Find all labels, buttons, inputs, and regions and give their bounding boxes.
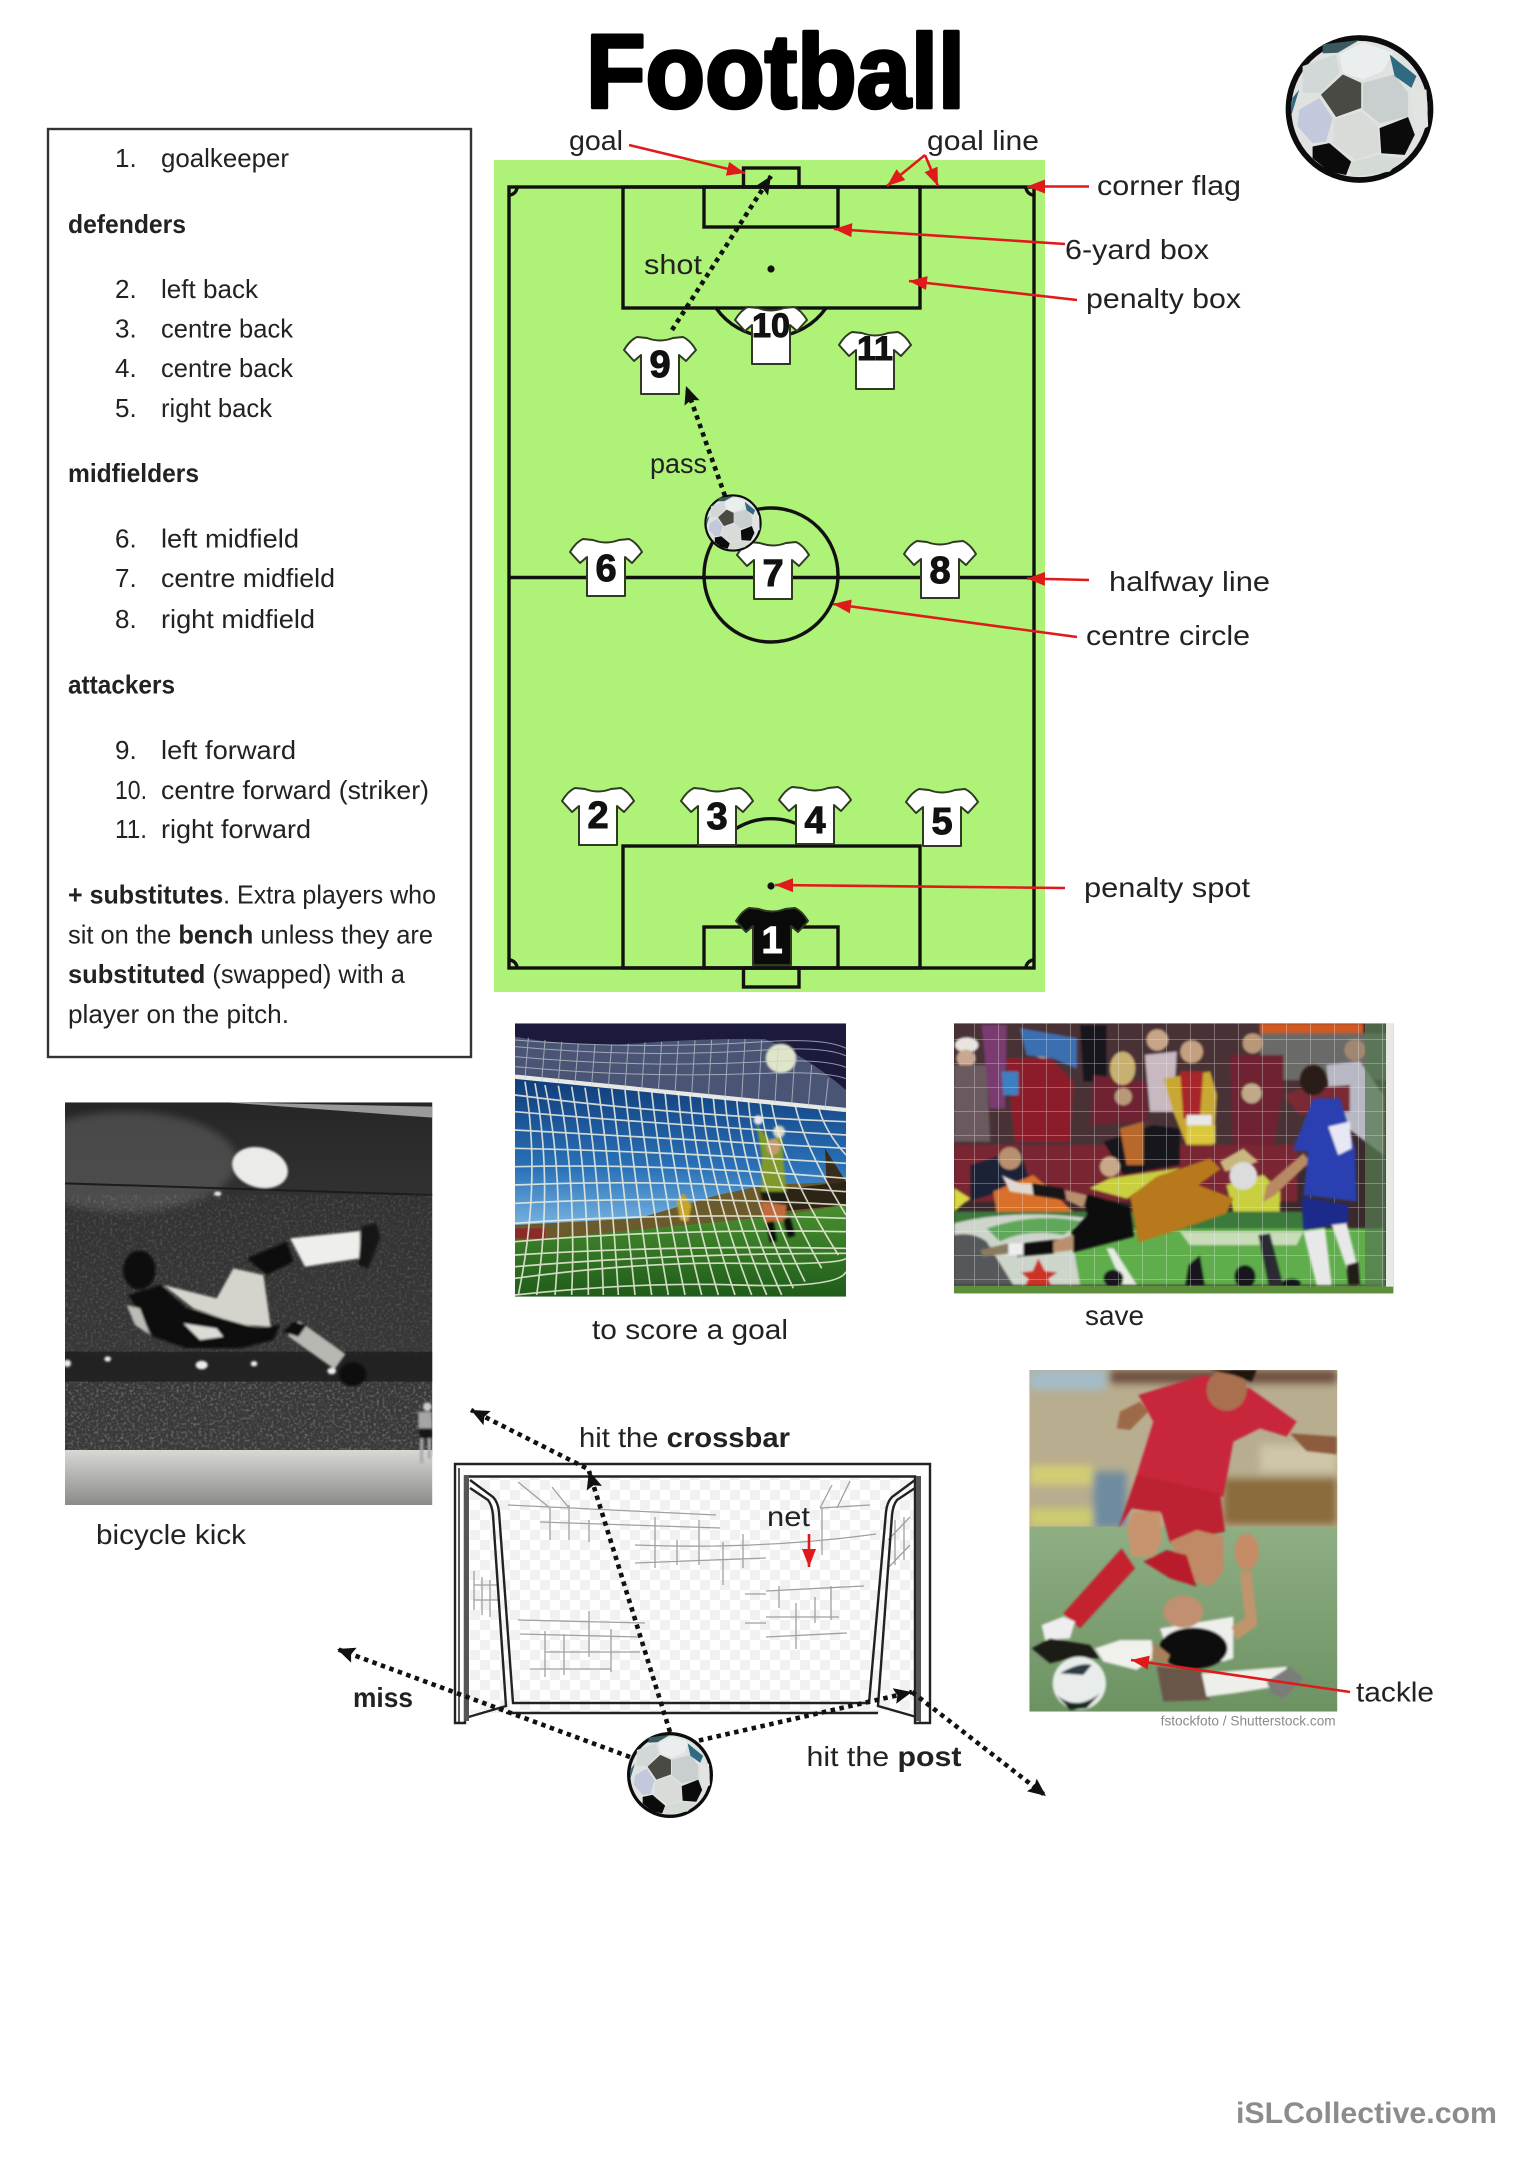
list: attackers: right forward (161, 814, 311, 844)
text block: substitutes: sit on the bench unless they are (68, 920, 433, 950)
shirt 11: 11 (857, 330, 893, 368)
pitch markings (509, 168, 1034, 987)
label: centre circle: centre circle (1086, 620, 1250, 651)
label: pass: pass (650, 448, 707, 479)
shirt 2 (562, 788, 634, 845)
label: hit the post: hit the post (806, 1741, 962, 1772)
list: midfielders (115, 524, 335, 634)
shirt 9: 9 (649, 344, 671, 386)
icon: ball below goal (629, 1734, 711, 1816)
caption: to score a goal: to score a goal (592, 1314, 788, 1345)
label: goal (569, 125, 745, 173)
list: defenders: 5. (115, 393, 137, 423)
label: tackle with arrow: tackle (1356, 1676, 1434, 1708)
list: defenders: centre back (161, 353, 294, 383)
list: defenders: 3. (115, 314, 137, 344)
label: penalty box: penalty box (1086, 283, 1241, 314)
caption: save: save (1085, 1300, 1144, 1331)
shirt 5 (906, 789, 978, 846)
shirt 10 (735, 307, 807, 364)
label: penalty spot: penalty spot (1084, 872, 1250, 903)
list: attackers: 9. (115, 735, 137, 765)
shirt 1 goalkeeper (736, 908, 808, 965)
label: goal line (887, 125, 1039, 186)
label: goal: goal (569, 125, 623, 156)
heading: midfielders: midfielders (68, 458, 199, 488)
label: tackle with arrow (1131, 1660, 1434, 1708)
list: attackers: centre forward (striker) (161, 775, 429, 805)
photo: save (954, 1023, 1393, 1293)
label: hit the crossbar: hit the crossbar (579, 1422, 790, 1453)
photo: tackle (1029, 1369, 1337, 1729)
shirt 6 (570, 539, 642, 596)
arrow: shot (672, 176, 771, 330)
list: attackers (115, 735, 429, 844)
shirt 7 (737, 542, 809, 599)
goal frame (455, 1464, 930, 1723)
shirt 7: 7 (762, 553, 784, 595)
list: attackers: left forward (161, 735, 296, 765)
arrow: post rebound (912, 1692, 1046, 1796)
shirt 9 (624, 337, 696, 394)
caption: bicycle kick: bicycle kick (96, 1519, 247, 1550)
list: midfielders: right midfield (161, 604, 315, 634)
title: Football (586, 14, 965, 130)
list: midfielders: 6. (115, 524, 137, 554)
net sketch lines (474, 1481, 910, 1677)
label: goal line: goal line (927, 125, 1039, 156)
label: shot: shot (644, 249, 702, 280)
shirt 1 goalkeeper: 1 (761, 920, 783, 962)
goal net background (470, 1478, 915, 1713)
text block: substitutes: substituted (swapped) with a (68, 959, 406, 989)
shirt 2: 2 (587, 795, 609, 837)
panel: positions list (48, 129, 471, 1057)
list: midfielders: 8. (115, 604, 137, 634)
label: net with arrow: net (767, 1501, 810, 1532)
label: corner flag: corner flag (1097, 170, 1241, 201)
shirt 10: 10 (752, 307, 790, 345)
text block: substitutes (68, 880, 436, 1029)
shirt 8: 8 (929, 550, 951, 592)
list: goalkeeper: 1. (115, 143, 137, 173)
list: defenders: centre back (161, 314, 294, 344)
list: attackers: 11. (115, 814, 147, 844)
label: penalty box (909, 281, 1241, 314)
heading: attackers: attackers (68, 670, 175, 700)
label: 6-yard box: 6-yard box (1065, 234, 1209, 265)
text block: substitutes: player on the pitch. (68, 999, 289, 1029)
shirt 3: 3 (706, 796, 728, 838)
list: defenders: left back (161, 274, 259, 304)
label: centre circle (833, 604, 1250, 651)
caption: photo credit: fstockfoto / Shutterstock.com (1161, 1713, 1336, 1729)
shirt 4 (779, 787, 851, 844)
arrow: hit the crossbar (589, 1471, 670, 1732)
photo: to score a goal (515, 1023, 858, 1297)
list: defenders: 4. (115, 353, 137, 383)
label: miss: miss (353, 1682, 413, 1713)
shirt 11 (839, 330, 911, 389)
shirt 4: 4 (804, 800, 826, 842)
icon: ball on pitch (705, 495, 761, 551)
list: attackers: 10. (115, 775, 147, 805)
label: 6-yard box (834, 229, 1209, 265)
arrow: hit the post (699, 1692, 912, 1740)
photo: bicycle kick (64, 1102, 432, 1505)
heading: defenders: defenders (68, 209, 186, 239)
label: halfway line: halfway line (1109, 566, 1270, 597)
list: goalkeeper: goalkeeper (161, 143, 289, 173)
list: defenders: 2. (115, 274, 137, 304)
arrow: pass (686, 386, 725, 496)
shirt 8 (904, 541, 976, 598)
list: midfielders: centre midfield (161, 563, 335, 593)
panel: football pitch (494, 160, 1045, 992)
shirt 3 (681, 788, 753, 845)
penalty spots (767, 265, 775, 890)
list: defenders: right back (161, 393, 273, 423)
watermark: iSLCollective.com (1236, 2097, 1497, 2130)
label: penalty spot (775, 872, 1250, 903)
shirt 5: 5 (931, 801, 953, 843)
list: midfielders: left midfield (161, 524, 299, 554)
shirt 6: 6 (595, 548, 617, 590)
list: defenders (115, 274, 294, 423)
arrow: crossbar rebound (471, 1410, 586, 1468)
diagram: goal (455, 1464, 930, 1723)
list: midfielders: 7. (115, 563, 137, 593)
label: net with arrow (767, 1501, 810, 1567)
arrow: miss (337, 1649, 630, 1757)
text block: substitutes: + substitutes. Extra players who (68, 880, 436, 910)
icon: football top right (1288, 38, 1431, 180)
